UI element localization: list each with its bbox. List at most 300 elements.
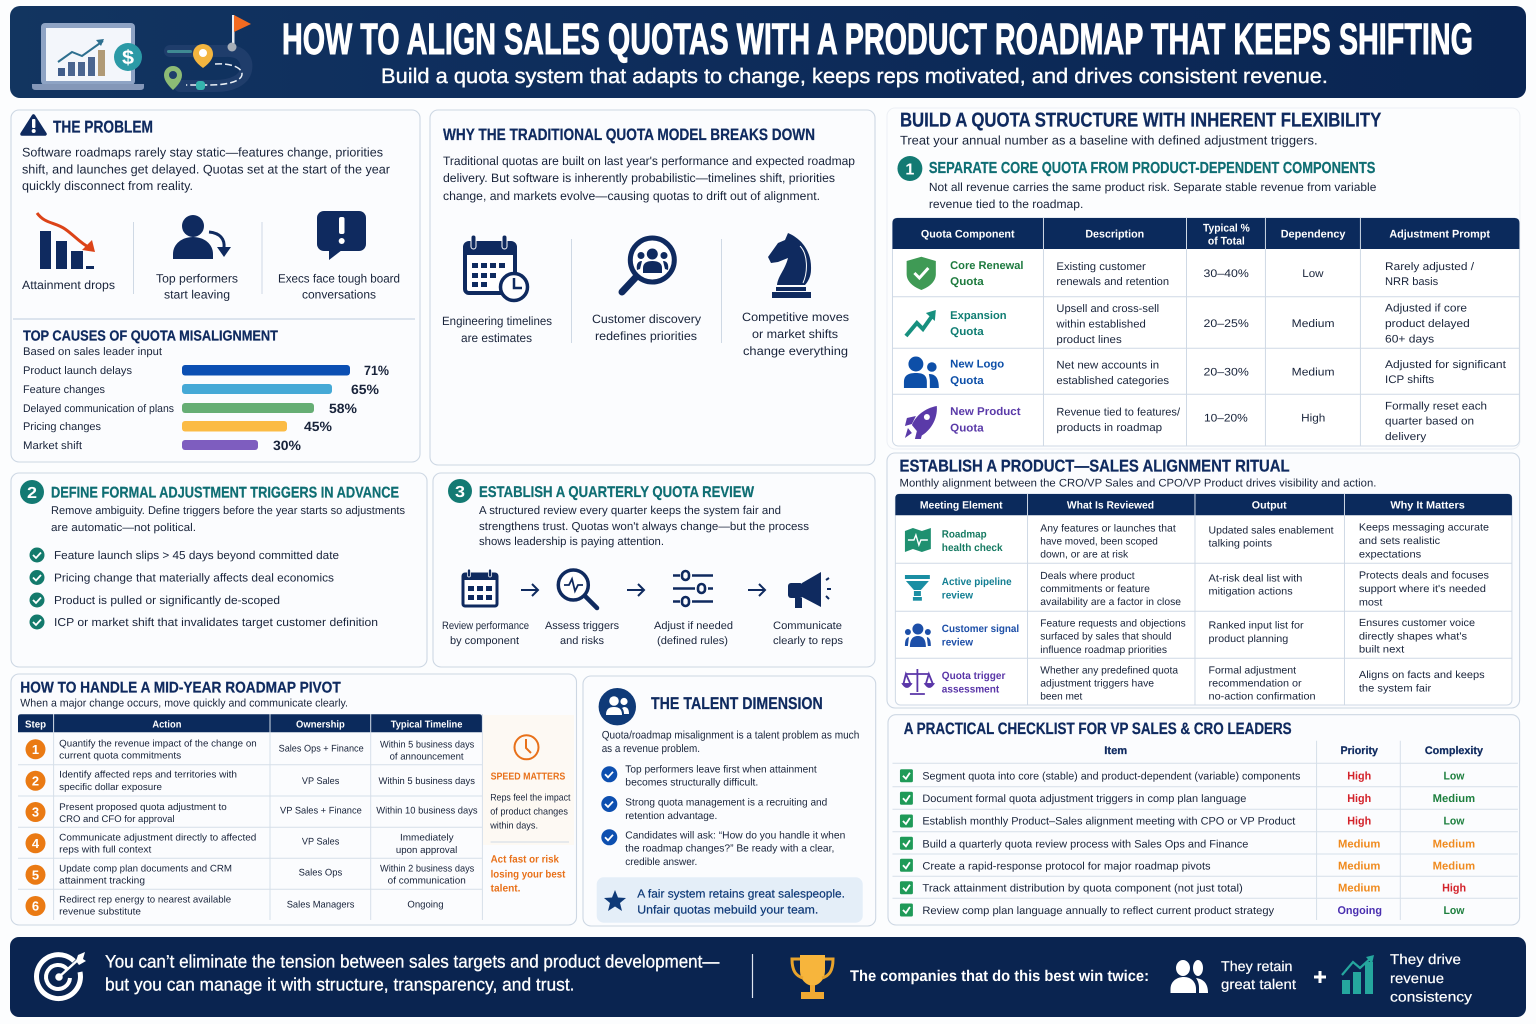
callout: speed matters	[483, 715, 574, 895]
text: retain talent: great talent	[1221, 976, 1296, 992]
label: customer discovery	[592, 312, 701, 343]
table: ritual: Roadmap	[942, 529, 987, 541]
arrow	[748, 584, 765, 596]
table: pivot steps: Communicate adjustment directly to affected	[59, 832, 256, 843]
checkbox icons	[900, 769, 913, 916]
bar chart: causes: Product launch delays	[23, 365, 133, 377]
table: quota components: of Total	[1208, 235, 1245, 247]
checklist: talent points: Top performers leave first when attainment	[625, 764, 817, 775]
bar chart: causes: 58%	[329, 401, 357, 416]
badge 3: 3	[455, 484, 465, 501]
table: ritual: assessment	[942, 683, 1000, 695]
table: quota components: delivery	[1385, 431, 1427, 443]
table: ritual: talking points	[1209, 538, 1272, 549]
table: quota components: 20–30%	[1204, 366, 1249, 378]
text block: problem description	[22, 146, 390, 193]
table: pivot steps: revenue substitute	[59, 907, 141, 918]
table: quota components: Quota Component	[921, 229, 1015, 241]
icon: magnifier with pulse	[558, 570, 597, 608]
table: pivot steps: upon approval	[396, 845, 457, 856]
table: ritual: surfaced by sales that should	[1040, 632, 1172, 643]
table: quota components: within established	[1055, 319, 1146, 331]
bar chart: causes: Market shift	[23, 440, 82, 452]
table: checklist: Medium	[1433, 838, 1475, 850]
heading: why: WHY THE TRADITIONAL QUOTA MODEL BREAKS DOWN	[443, 126, 815, 144]
callout: speed matters: talent.	[491, 883, 521, 895]
panel: practical checklist	[888, 715, 1520, 925]
bar chart: causes: 30%	[273, 438, 301, 453]
table: pivot steps: Within 5 business days	[380, 739, 474, 750]
text block: why description	[443, 154, 855, 203]
icon: customer group	[905, 624, 931, 647]
table: quota components: Formally reset each	[1385, 400, 1487, 412]
table: quota components: product lines	[1056, 334, 1122, 346]
table: ritual: Ensures customer voice	[1359, 618, 1475, 629]
text block: closing message: You can’t eliminate the tension between sales targets and product development—	[105, 952, 719, 972]
table: ritual: adjustment triggers have	[1040, 678, 1154, 689]
icon: growth chart	[1342, 955, 1374, 994]
icon: people	[1170, 960, 1208, 993]
table: quota components: Adjusted if core	[1385, 303, 1467, 315]
label: engineering timelines	[442, 314, 552, 345]
table: pivot steps: Within 2 business days	[380, 864, 474, 875]
text: drive revenue consistency: revenue	[1390, 970, 1444, 986]
table: ritual: Feature requests and objections	[1040, 619, 1186, 630]
plus sign	[1314, 971, 1326, 983]
table: quota components: Expansion	[950, 310, 1007, 322]
callout: fair system: Unfair quotas mebuild your team.	[637, 903, 818, 916]
table: ritual: Output	[1252, 500, 1287, 512]
table: ritual: and sets realistic	[1359, 536, 1440, 547]
table: quota components: Rarely adjusted /	[1385, 261, 1475, 273]
pivot subtitle: When a major change occurs, move quickly and communicate clearly.	[20, 698, 348, 710]
text block: separate description: revenue tied to the roadmap.	[929, 197, 1083, 211]
label: customer discovery: Customer discovery	[592, 312, 701, 326]
table: pivot steps: Typical Timeline	[391, 719, 463, 730]
table: quota components: New Product	[950, 406, 1021, 418]
text: companies win twice: The companies that do this best win twice:	[850, 968, 1149, 985]
table: quota components: established categories	[1056, 375, 1170, 387]
icon: speech bubble alert	[317, 211, 366, 260]
heading: top causes: TOP CAUSES OF QUOTA MISALIGNMENT	[23, 328, 278, 344]
label: execs: Execs face tough board	[278, 272, 400, 286]
icon: shield	[907, 257, 936, 290]
label: competitive moves: Competitive moves	[742, 310, 849, 324]
text block: review description	[479, 505, 809, 548]
text block: closing message: but you can manage it with structure, transparency, and trust.	[105, 974, 574, 994]
table: checklist: Low	[1443, 816, 1465, 828]
table: quota components: Core Renewal	[950, 260, 1024, 272]
icon: calendar	[463, 569, 497, 606]
table: quota components: renewals and retention	[1056, 276, 1169, 288]
table: ritual: Ranked input list for	[1209, 621, 1304, 632]
label: top performers: Top performers	[156, 272, 238, 286]
text block: separate description	[929, 180, 1377, 211]
step number badges: 6	[32, 899, 39, 914]
table: pivot steps: Step	[25, 719, 46, 730]
text block: separate description: Not all revenue carries the same product risk. Separate stable revenue from variable	[929, 180, 1377, 194]
table: pivot steps: of communication	[388, 876, 466, 887]
label: customer discovery: redefines priorities	[595, 329, 697, 343]
label: top performers: start leaving	[164, 288, 230, 302]
text: retain talent: They retain	[1221, 958, 1292, 974]
label: engineering timelines: Engineering timelines	[442, 314, 552, 328]
step labels: (defined rules)	[657, 635, 728, 647]
table: quota components: Typical %	[1203, 223, 1250, 235]
table: pivot steps: Sales Managers	[287, 899, 355, 910]
table: pivot steps: reps with full context	[59, 845, 152, 856]
table: checklist: Medium	[1338, 882, 1380, 894]
table: quota components: Description	[1085, 229, 1144, 241]
step labels: Review performance	[442, 620, 529, 632]
table: ritual: mitigation actions	[1209, 587, 1293, 598]
table: pivot steps: Action	[152, 719, 181, 730]
table: ritual: Keeps messaging accurate	[1359, 522, 1489, 533]
table: quota components: Medium	[1292, 318, 1335, 330]
table: pivot steps: current quota commitments	[59, 750, 181, 761]
table: pivot steps: Sales Ops + Finance	[279, 744, 364, 755]
table: checklist: Track attainment distribution by quota component (not just total)	[922, 882, 1243, 894]
step number badges: 5	[32, 867, 39, 882]
table: ritual: health check	[942, 542, 1003, 554]
table: quota components: NRR basis	[1385, 276, 1439, 288]
subtitle: Build a quota system that adapts to change, keeps reps motivated, and drives consistent revenue.	[381, 65, 1328, 88]
text block: review description: strengthens trust. Quotas won't always change—but the process	[479, 521, 809, 533]
table: checklist: Build a quarterly quota review process with Sales Ops and Finance	[922, 838, 1248, 850]
bar chart: causes: 71%	[364, 363, 389, 378]
text block: talent description	[602, 729, 859, 755]
table: checklist: Medium	[1338, 838, 1380, 850]
table: checklist: Item	[1104, 745, 1127, 757]
panel: mid-year roadmap pivot	[11, 674, 576, 925]
step labels: Adjust if needed	[654, 620, 733, 632]
panel: why the traditional model breaks down	[430, 110, 875, 465]
text: drive revenue consistency	[1390, 951, 1472, 1005]
table: pivot steps: Redirect rep energy to nearest available	[59, 895, 231, 906]
icon: clock	[514, 735, 538, 759]
table: pivot steps: Ownership	[296, 719, 345, 730]
text: retain talent	[1221, 958, 1296, 992]
table: ritual: recommendation or	[1209, 678, 1302, 689]
label: top performers	[156, 272, 238, 302]
icon: roadmap with pins and flag	[164, 15, 251, 90]
text block: talent description: as a revenue problem.	[602, 743, 700, 755]
callout: speed matters: SPEED MATTERS	[491, 771, 566, 782]
text block: triggers description: Remove ambiguity. Define triggers before the year starts so adjustments	[51, 505, 405, 517]
table: ritual: have moved, been scoped	[1040, 536, 1158, 547]
step number badges: 1	[32, 742, 39, 757]
ritual subtitle: Monthly alignment between the CRO/VP Sales and CPO/VP Product drives visibility and action.	[900, 478, 1376, 490]
checklist: talent points: credible answer.	[625, 857, 697, 868]
heading: checklist: A PRACTICAL CHECKLIST FOR VP SALES & CRO LEADERS	[904, 720, 1292, 738]
table: quota components: 10–20%	[1204, 413, 1248, 425]
table: ritual: been met	[1040, 691, 1082, 702]
table: checklist: Priority	[1340, 745, 1379, 757]
bar chart: causes: 45%	[304, 419, 332, 434]
icon: magnifier with people	[622, 238, 674, 292]
label: competitive moves: or market shifts	[752, 327, 838, 341]
table: checklist: High	[1442, 882, 1466, 894]
table: checklist: Ongoing	[1338, 905, 1382, 917]
table: checklist: Medium	[1433, 793, 1475, 805]
table: checklist: High	[1347, 770, 1371, 782]
callout: speed matters: of product changes	[490, 807, 568, 818]
heading: talent: THE TALENT DIMENSION	[651, 694, 823, 713]
table: checklist: Establish monthly Product–Sales alignment meeting with CPO or VP Product	[922, 816, 1295, 828]
table: quota components: Low	[1302, 268, 1324, 280]
table: ritual: Formal adjustment	[1209, 665, 1296, 676]
table: pivot steps: Update comp plan documents and CRM	[59, 864, 232, 875]
table: ritual: Active pipeline	[942, 576, 1012, 588]
table: quota components: Adjustment Prompt	[1389, 229, 1490, 241]
icon: chess knight	[768, 233, 811, 298]
text block: triggers description: are automatic—not political.	[51, 522, 196, 534]
label: attainment drops: Attainment drops	[22, 278, 115, 292]
table: quota components: 30–40%	[1204, 268, 1249, 280]
icon: roadmap map	[905, 528, 931, 552]
callout: speed matters: losing your best	[491, 868, 566, 880]
step labels	[442, 620, 844, 647]
bar chart: causes	[23, 363, 389, 453]
icon: calendar with clock	[465, 235, 528, 300]
table: pivot steps: Identify affected reps and territories with	[59, 770, 237, 781]
table: pivot steps	[18, 714, 482, 920]
table: ritual: What Is Reviewed	[1067, 500, 1154, 512]
table: quota components: Net new accounts in	[1056, 360, 1159, 372]
callout: fair system: A fair system retains great salespeople.	[637, 887, 845, 900]
table: quota components: product delayed	[1385, 318, 1470, 330]
table: ritual: product planning	[1209, 634, 1289, 645]
heading: ritual: ESTABLISH A PRODUCT—SALES ALIGNMENT RITUAL	[900, 457, 1290, 476]
heading: separate core quota: SEPARATE CORE QUOTA FROM PRODUCT-DEPENDENT COMPONENTS	[929, 160, 1376, 177]
icon: trophy	[792, 955, 833, 999]
badge 1	[897, 156, 922, 181]
table: ritual: directly shapes what's	[1359, 631, 1467, 642]
table: ritual: Meeting Element	[920, 500, 1003, 512]
table: pivot steps: Sales Ops	[299, 868, 342, 879]
table: ritual: support where it's needed	[1359, 584, 1486, 595]
checklist: triggers: Pricing change that materially affects deal economics	[54, 572, 334, 584]
callout: fair system	[597, 877, 863, 923]
text: drive revenue consistency: They drive	[1390, 951, 1461, 967]
bar chart: causes: Feature changes	[23, 384, 105, 396]
table: checklist: Low	[1443, 905, 1465, 917]
table: quota components: ICP shifts	[1385, 374, 1435, 386]
checklist: talent points: Candidates will ask: “How do you handle it when	[625, 830, 846, 841]
label: execs: conversations	[302, 288, 376, 302]
table: checklist: Medium	[1338, 860, 1380, 872]
step labels: Communicate	[773, 620, 842, 632]
bar chart: causes: Pricing changes	[23, 421, 101, 433]
table: checklist: Low	[1443, 770, 1465, 782]
table: pivot steps: attainment tracking	[59, 876, 145, 887]
icon: attainment drops	[37, 213, 95, 269]
table: pivot steps: specific dollar exposure	[59, 782, 162, 793]
icon: megaphone	[788, 572, 831, 608]
header banner	[10, 6, 1526, 98]
icon: people	[904, 356, 939, 388]
label: competitive moves	[742, 310, 849, 358]
checklist: triggers: ICP or market shift that invalidates target customer definition	[54, 617, 378, 629]
table: checklist: High	[1347, 816, 1371, 828]
step labels: by component	[450, 635, 519, 647]
heading: triggers: DEFINE FORMAL ADJUSTMENT TRIGGERS IN ADVANCE	[51, 484, 399, 502]
step number badges: 2	[32, 773, 39, 788]
table: quota components: quarter based on	[1385, 416, 1474, 428]
heading: pivot: HOW TO HANDLE A MID-YEAR ROADMAP PIVOT	[20, 680, 341, 697]
checklist: triggers: Feature launch slips > 45 days beyond committed date	[54, 550, 339, 562]
checklist: talent points: becomes structurally difficult.	[625, 778, 758, 789]
step labels: and risks	[560, 635, 605, 647]
arrow	[521, 584, 538, 596]
callout: speed matters: Reps feel the impact	[490, 793, 571, 804]
table: pivot steps: CRO and CFO for approval	[59, 814, 175, 825]
text block: why description: Traditional quotas are built on last year's performance and expected roadmap	[443, 154, 855, 168]
icon: people badge	[599, 688, 636, 725]
table: quota components: Upsell and cross-sell	[1056, 303, 1159, 315]
table: quota components: Existing customer	[1056, 261, 1146, 273]
checklist: talent points: the roadmap changes?” Be ready with a clear,	[625, 844, 834, 855]
subheading: treat annual number: Treat your annual number as a baseline with defined adjustment triggers.	[900, 134, 1318, 148]
heading: quarterly review: ESTABLISH A QUARTERLY QUOTA REVIEW	[479, 484, 754, 501]
table: quota components: Revenue tied to features/	[1056, 407, 1181, 419]
badge 3	[448, 479, 472, 503]
text block: problem description: Software roadmaps rarely stay static—features change, priorities	[22, 146, 383, 160]
badge 2: 2	[27, 485, 37, 502]
table: pivot steps: Quantify the revenue impact of the change on	[59, 738, 257, 749]
text block: talent description: Quota/roadmap misalignment is a talent problem as much	[602, 729, 859, 741]
table: ritual: Why It Matters	[1390, 500, 1465, 512]
table: ritual: review	[942, 636, 974, 648]
step number badges: 3	[32, 805, 39, 820]
table: ritual: Deals where product	[1040, 571, 1135, 582]
bar chart: causes: 65%	[351, 382, 379, 397]
label: execs	[278, 272, 400, 302]
table: pivot steps: VP Sales	[302, 776, 339, 787]
table: pivot steps: Immediately	[400, 833, 454, 844]
table: pivot steps: VP Sales + Finance	[280, 806, 362, 817]
checklist: talent points	[601, 764, 846, 868]
icon: laptop with chart	[32, 23, 144, 90]
table: quota components: 20–25%	[1204, 318, 1249, 330]
table: checklist: High	[1347, 793, 1371, 805]
table: ritual	[895, 494, 1512, 705]
icon: scales	[903, 669, 933, 694]
table: checklist: Medium	[1433, 860, 1475, 872]
step labels: Assess triggers	[545, 620, 620, 632]
table: ritual: Protects deals and focuses	[1359, 570, 1489, 581]
icon: sliders	[673, 571, 713, 606]
text block: problem description: quickly disconnect from reality.	[22, 179, 193, 193]
step number badges	[26, 739, 46, 916]
table: ritual: no-action confirmation	[1209, 691, 1316, 702]
table: checklist: Create a rapid-response protocol for major roadmap pivots	[922, 860, 1211, 872]
table: ritual: At-risk deal list with	[1209, 574, 1303, 585]
table: pivot steps: Ongoing	[407, 899, 444, 910]
label: engineering timelines: are estimates	[461, 331, 532, 345]
step labels: clearly to reps	[773, 635, 844, 647]
checklist: triggers: Product is pulled or significantly de-scoped	[54, 595, 280, 607]
panel: product-sales alignment ritual	[887, 453, 1520, 708]
table: ritual: the system fair	[1359, 683, 1432, 694]
icon: target with arrow	[36, 952, 86, 999]
heading: build quota structure: BUILD A QUOTA STRUCTURE WITH INHERENT FLEXIBILITY	[900, 110, 1382, 132]
table: pivot steps: of announcement	[390, 752, 464, 763]
table: ritual: Updated sales enablement	[1209, 525, 1334, 536]
table: ritual: expectations	[1359, 550, 1421, 561]
table: quota components: Quota	[950, 375, 984, 387]
table: quota components: Quota	[950, 276, 984, 288]
table: quota components: 60+ days	[1385, 334, 1435, 346]
table: quota components: Medium	[1292, 366, 1335, 378]
checklist: talent points: Strong quota management is a recruiting and	[625, 798, 828, 809]
panel: build a quota structure	[887, 108, 1520, 449]
table: ritual: review	[942, 589, 974, 601]
badge 1: 1	[905, 162, 914, 178]
table: ritual: Any features or launches that	[1040, 523, 1176, 534]
panel: the talent dimension	[583, 676, 876, 926]
table: checklist: Segment quota into core (stable) and product-dependent (variable) components	[922, 770, 1301, 782]
panel: quarterly quota review	[433, 473, 875, 667]
checklist: talent points: retention advantage.	[625, 811, 717, 822]
text block: closing message	[105, 952, 719, 994]
bar chart: causes: Delayed communication of plans	[23, 403, 174, 415]
table: checklist: Complexity	[1425, 745, 1484, 757]
table: checklist: Review comp plan language annually to reflect current product strategy	[922, 905, 1275, 917]
table: pivot steps: Within 10 business days	[376, 806, 478, 817]
checklist: triggers	[30, 548, 378, 630]
arrow	[627, 584, 644, 596]
table: ritual: most	[1359, 598, 1382, 609]
icon: rocket	[905, 406, 937, 439]
table: quota components: New Logo	[950, 359, 1004, 371]
table: ritual: influence roadmap priorities	[1040, 645, 1167, 656]
badge 2	[20, 480, 44, 504]
text block: why description: delivery. But software is inherently probabilistic—timelines shift, priorities	[443, 171, 835, 185]
text: drive revenue consistency: consistency	[1390, 989, 1472, 1005]
table: quota components: products in roadmap	[1056, 422, 1162, 434]
callout: speed matters: Act fast or risk	[491, 854, 559, 866]
table: ritual: Customer signal	[942, 623, 1019, 635]
icon: warning triangle	[22, 116, 45, 134]
footer banner	[10, 937, 1526, 1017]
table: quota components	[892, 218, 1519, 446]
table: ritual: availability are a factor in close	[1040, 597, 1181, 608]
table: quota components: Dependency	[1281, 229, 1346, 241]
icon: laptop with chart: $	[122, 47, 134, 69]
table: ritual: built next	[1359, 645, 1404, 656]
panel: define adjustment triggers	[11, 473, 427, 667]
icon: growth arrow	[906, 310, 936, 336]
table: quota components: Quota	[950, 423, 984, 435]
table: checklist: Document formal quota adjustment triggers in comp plan language	[922, 793, 1246, 805]
table: checklist	[892, 741, 1518, 920]
text block: review description: A structured review every quarter keeps the system fair and	[479, 505, 781, 517]
panel: the problem	[11, 110, 420, 462]
table: quota components: Adjusted for significant	[1385, 359, 1506, 371]
step number badges: 4	[32, 836, 40, 851]
table: ritual: commitments or feature	[1040, 584, 1150, 595]
table: ritual: Whether any predefined quota	[1040, 665, 1178, 676]
label: competitive moves: change everything	[743, 344, 848, 358]
text block: review description: shows leadership is paying attention.	[479, 536, 664, 548]
table: ritual: Quota trigger	[942, 670, 1005, 682]
table: quota components: Quota	[950, 326, 984, 338]
table: ritual: down, or are at risk	[1040, 549, 1129, 560]
text block: why description: change, and markets evolve—causing quotas to drift out of alignment.	[443, 189, 820, 203]
chart subtitle: Based on sales leader input	[23, 346, 162, 358]
table: pivot steps: Within 5 business days	[378, 776, 475, 787]
